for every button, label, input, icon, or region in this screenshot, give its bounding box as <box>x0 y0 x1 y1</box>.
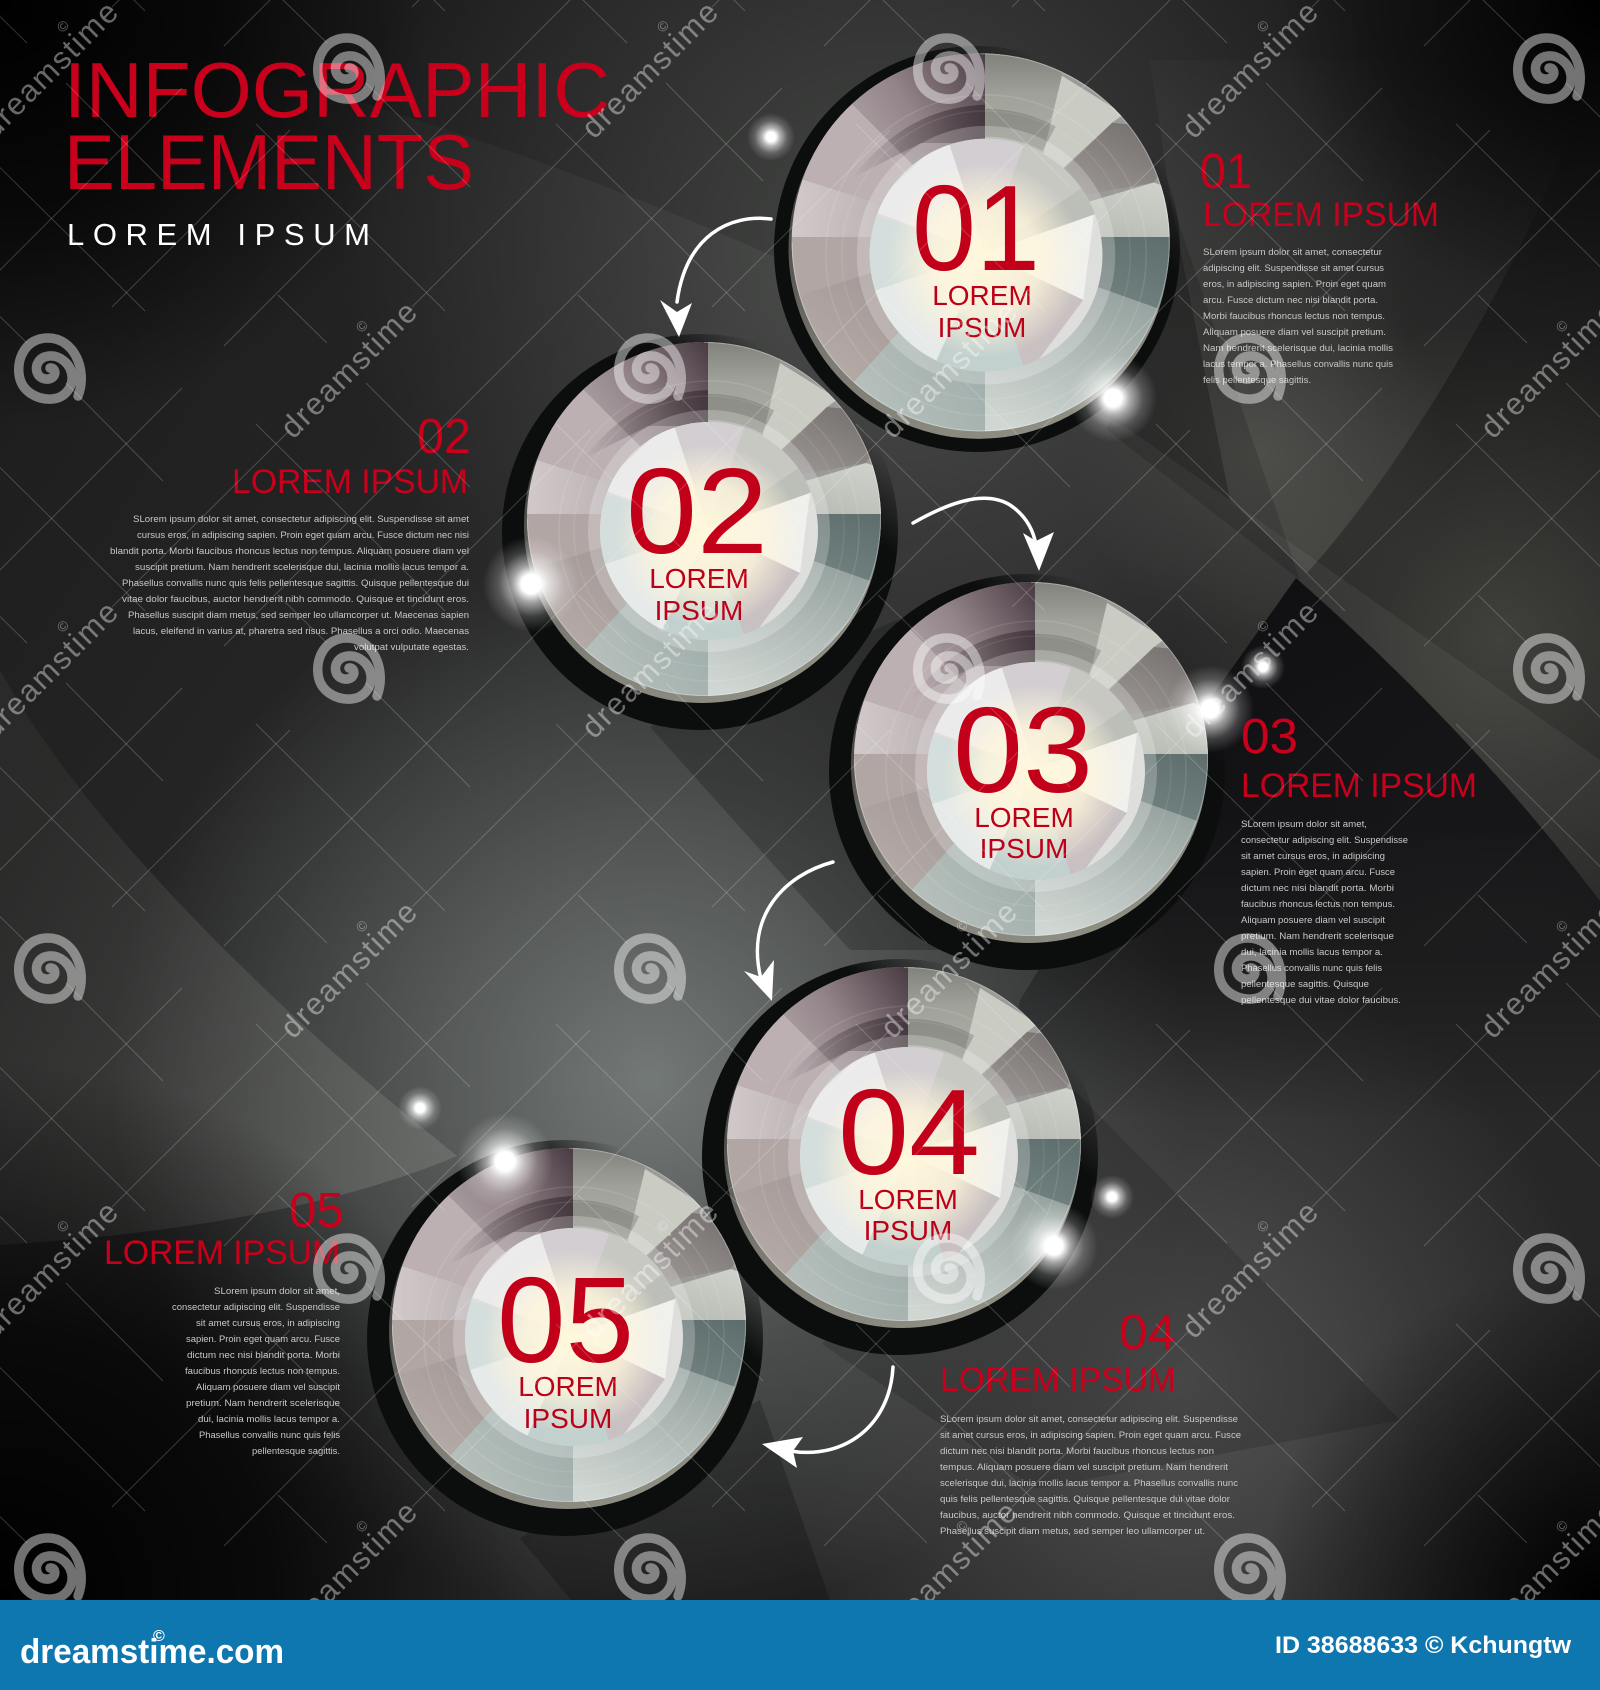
footer banner <box>0 1600 1600 1690</box>
body 04: Phasellus suscipit diam metus, sed semper leo ullamcorper ut. <box>940 1526 1205 1537</box>
watermark text: © <box>53 616 73 635</box>
text block 03 <box>1241 710 1477 1006</box>
body 05: pellentesque sagittis. <box>252 1446 340 1457</box>
body 04: sit amet cursus eros, in adipiscing sapien. Proin eget quam arcu. Fusce <box>940 1430 1241 1441</box>
lens graphic 01 <box>782 34 1188 445</box>
heading 01: 01 <box>1200 145 1252 199</box>
watermark text: © <box>352 1516 372 1535</box>
text block 04 <box>940 1306 1241 1537</box>
body 02 <box>110 514 469 653</box>
body 05: dui, lacinia mollis lacus tempor a. <box>198 1414 340 1425</box>
disc label 04: LOREM <box>858 1184 958 1215</box>
disc label 01: LOREM <box>932 280 1032 311</box>
body 01: Aliquam posuere diam vel suscipit pretium. <box>1203 327 1386 338</box>
watermark text: © <box>1552 316 1572 335</box>
body 03: sapien. Proin eget quam arcu. Fusce <box>1241 867 1395 878</box>
text block 05 <box>104 1184 344 1457</box>
black ring 02 <box>502 334 898 730</box>
watermark text: © <box>1552 916 1572 935</box>
body 05: dictum nec nisi blandit porta. Morbi <box>187 1350 340 1361</box>
step disc 04 <box>702 949 1098 1355</box>
disc label 04: IPSUM <box>864 1215 952 1246</box>
watermark text: © <box>1253 16 1273 35</box>
text block 02 <box>110 410 471 653</box>
watermark text: dreamstime <box>1174 594 1325 745</box>
body 03: SLorem ipsum dolor sit amet, <box>1241 819 1367 830</box>
arrow: 04 to 05 <box>762 1367 893 1468</box>
watermark text: © <box>352 316 372 335</box>
body 01: arcu. Fusce dictum nec nisi blandit porta. <box>1203 295 1378 306</box>
body 01: SLorem ipsum dolor sit amet, consectetur <box>1203 247 1383 258</box>
subheading 02: LOREM IPSUM <box>232 463 468 501</box>
disc label 01: IPSUM <box>938 312 1026 343</box>
footer logo: dreamstime.com <box>20 1633 284 1671</box>
watermark text: dreamstime <box>273 294 424 445</box>
image credit: ID 38688633 © Kchungtw <box>1275 1632 1571 1659</box>
body 03: pellentesque sagittis. Quisque <box>1241 979 1369 990</box>
subtitle: LOREM IPSUM <box>67 217 370 252</box>
watermark text: © <box>653 1216 673 1235</box>
watermark text: © <box>352 916 372 935</box>
title block <box>64 46 610 252</box>
watermark text: © <box>1552 1516 1572 1535</box>
watermark text: © <box>952 1516 972 1535</box>
watermark text: dreamstime <box>273 1494 424 1645</box>
body 03: sit amet cursus eros, in adipiscing <box>1241 851 1385 862</box>
lens graphic 04 <box>718 949 1098 1334</box>
black ring 01 <box>774 46 1180 452</box>
body 03: pellentesque dui vitae dolor faucibus. <box>1241 995 1401 1006</box>
icon: logo spiral: © <box>153 1628 165 1645</box>
subheading 04: LOREM IPSUM <box>940 1361 1176 1399</box>
body 05: SLorem ipsum dolor sit amet, <box>214 1286 340 1297</box>
body 01 <box>1203 247 1393 386</box>
body 04: scelerisque dui, lacinia mollis lacus tempor a. Phasellus convallis nunc <box>940 1478 1238 1489</box>
step disc 01 <box>774 34 1188 452</box>
number 01: 01 <box>912 160 1040 296</box>
step disc 03 <box>829 564 1225 970</box>
arrow: 02 to 03 <box>913 498 1054 571</box>
body 03: faucibus rhoncus lectus non tempus. <box>1241 899 1395 910</box>
disc label 02: IPSUM <box>655 595 743 626</box>
watermark text: dreamstime <box>873 894 1024 1045</box>
body 02: lacus, eleifend in varius at, pharetra sed risus. Phasellus a orci odio. Maecenas <box>133 626 469 637</box>
disc label 03: LOREM <box>974 802 1074 833</box>
arrow: 01 to 02 <box>660 218 771 337</box>
body 05: faucibus rhoncus lectus non tempus. <box>185 1366 340 1377</box>
body 05: Phasellus convallis nunc quis felis <box>199 1430 340 1441</box>
number 03: 03 <box>953 682 1093 818</box>
lens graphic 05 <box>383 1130 763 1515</box>
watermark text: dreamstime <box>1174 1194 1325 1345</box>
body 01: Morbi faucibus rhoncus lectus non tempus. <box>1203 311 1385 322</box>
disc label 02: LOREM <box>649 563 749 594</box>
body 01: felis pellentesque sagittis. <box>1203 375 1311 386</box>
watermark text: © <box>653 16 673 35</box>
watermark text: dreamstime <box>574 1194 725 1345</box>
body 02: cursus eros, in adipiscing sapien. Proin eget quam arcu. Fusce dictum nec nisi <box>137 530 469 541</box>
lens graphic 03 <box>845 564 1225 949</box>
body 03: dictum nec nisi blandit porta. Morbi <box>1241 883 1394 894</box>
watermark text: dreamstime <box>273 894 424 1045</box>
watermark text: © <box>653 616 673 635</box>
body 05: sit amet cursus eros, in adipiscing <box>196 1318 340 1329</box>
watermark text: dreamstime <box>873 294 1024 445</box>
body 04: tempus. Aliquam posuere diam vel suscipit pretium. Nam hendrerit <box>940 1462 1228 1473</box>
body 04: dictum nec nisi blandit porta. Morbi faucibus rhoncus lectus non <box>940 1446 1214 1457</box>
body 02: SLorem ipsum dolor sit amet, consectetur adipiscing elit. Suspendisse sit amet <box>133 514 469 525</box>
number 05: 05 <box>497 1252 634 1388</box>
body 04: faucibus, auctor hendrerit nibh commodo. Quisque et tincidunt eros. <box>940 1510 1235 1521</box>
heading 03: 03 <box>1241 710 1298 764</box>
lens graphic 02 <box>518 324 898 709</box>
body 03: pretium. Nam hendrerit scelerisque <box>1241 931 1394 942</box>
heading 04: 04 <box>1119 1306 1176 1360</box>
step disc 02 <box>502 324 898 730</box>
watermark text: dreamstime <box>873 1494 1024 1645</box>
disc label 03: IPSUM <box>980 833 1068 864</box>
body 05 <box>172 1286 340 1457</box>
subheading 05: LOREM IPSUM <box>104 1234 340 1272</box>
body 01: eros, in adipiscing sapien. Proin eget quam <box>1203 279 1386 290</box>
body 01: lacus tempor a. Phasellus convallis nunc quis <box>1203 359 1393 370</box>
body 02: Phasellus suscipit diam metus, sed semper leo ullamcorper ut. Maecenas sapien <box>128 610 469 621</box>
watermark text: © <box>53 16 73 35</box>
body 05: Aliquam posuere diam vel suscipit <box>196 1382 340 1393</box>
black ring 03 <box>829 574 1225 970</box>
body 02: Phasellus convallis nunc quis felis pellentesque sagittis. Quisque pellentesque dui <box>122 578 469 589</box>
light flares <box>398 113 1285 1290</box>
body 02: blandit porta. Morbi faucibus rhoncus lectus non tempus. Aliquam posuere diam vel <box>110 546 469 557</box>
step disc 05 <box>367 1130 763 1536</box>
disc label 05: IPSUM <box>524 1403 612 1434</box>
black ring 05 <box>367 1140 763 1536</box>
body 03 <box>1241 819 1408 1006</box>
watermark text: © <box>952 316 972 335</box>
body 01: adipiscing elit. Suspendisse sit amet cursus <box>1203 263 1384 274</box>
body 02: suscipit pretium. Nam hendrerit scelerisque dui, lacinia mollis lacus tempor a. <box>135 562 469 573</box>
heading 05: 05 <box>289 1184 344 1238</box>
body 01: Nam hendrerit scelerisque dui, lacinia mollis <box>1203 343 1393 354</box>
subheading 01: LOREM IPSUM <box>1203 196 1439 234</box>
body 03: consectetur adipiscing elit. Suspendisse <box>1241 835 1408 846</box>
body 03: dui, lacinia mollis lacus tempor a. <box>1241 947 1383 958</box>
body 03: Aliquam posuere diam vel suscipit <box>1241 915 1385 926</box>
body 04: quis felis pellentesque sagittis. Quisque pellentesque dui vitae dolor <box>940 1494 1231 1505</box>
watermark text: © <box>1253 616 1273 635</box>
title line 1: INFOGRAPHIC <box>64 46 610 134</box>
body 05: pretium. Nam hendrerit scelerisque <box>186 1398 340 1409</box>
disc label 05: LOREM <box>518 1371 618 1402</box>
watermark text: dreamstime <box>574 594 725 745</box>
heading 02: 02 <box>417 410 471 464</box>
body 05: sapien. Proin eget quam arcu. Fusce <box>186 1334 340 1345</box>
watermark text: © <box>1253 1216 1273 1235</box>
arrow: 03 to 04 <box>744 862 833 1001</box>
subheading 03: LOREM IPSUM <box>1241 767 1477 805</box>
text block 01 <box>1200 145 1439 386</box>
title line 2: ELEMENTS <box>64 118 474 206</box>
body 03: Phasellus convallis nunc quis felis <box>1241 963 1382 974</box>
number 04: 04 <box>838 1064 980 1200</box>
body 04 <box>940 1414 1241 1537</box>
number 02: 02 <box>626 443 768 579</box>
black ring 04 <box>702 959 1098 1355</box>
watermark text: © <box>952 916 972 935</box>
body 02: vitae dolor faucibus, auctor hendrerit nibh commodo. Quisque et tincidunt eros. <box>122 594 469 605</box>
body 04: SLorem ipsum dolor sit amet, consectetur adipiscing elit. Suspendisse <box>940 1414 1238 1425</box>
body 05: consectetur adipiscing elit. Suspendisse <box>172 1302 340 1313</box>
watermark text: © <box>53 1216 73 1235</box>
body 02: volutpat vulputate egestas. <box>354 642 469 653</box>
